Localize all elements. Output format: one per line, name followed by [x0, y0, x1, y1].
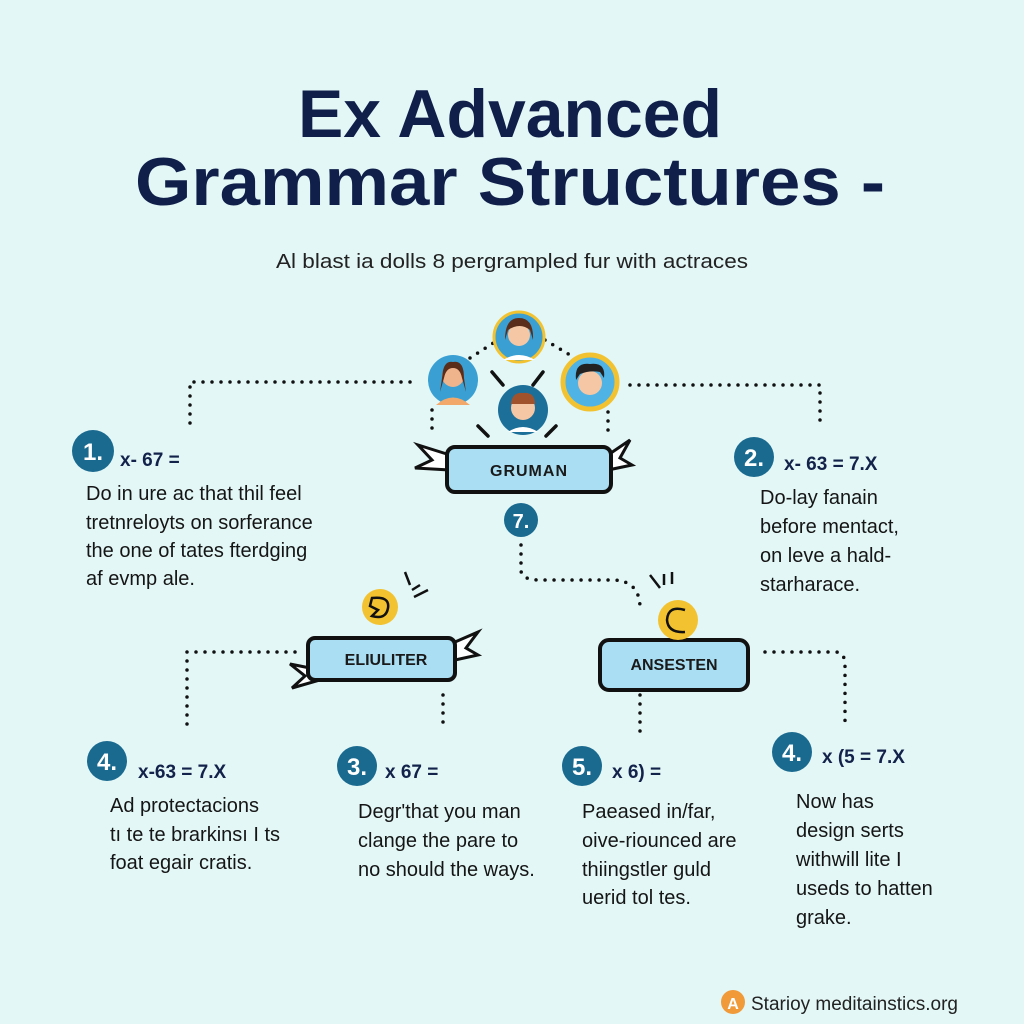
- icon: coin: [362, 572, 428, 625]
- banner: ANSESTEN: ANSESTEN: [630, 657, 718, 674]
- item 2: before mentact,: [760, 516, 899, 538]
- item 3: 3.: [347, 754, 367, 781]
- subtitle: Al blast ia dolls 8 pergrampled fur with actraces: [276, 251, 748, 273]
- item 3: [337, 746, 535, 881]
- item 5: x 6) =: [612, 762, 661, 783]
- item 4 right: Now has: [796, 791, 874, 813]
- item 2: [734, 437, 899, 596]
- item 4 left: x-63 = 7.X: [138, 762, 227, 783]
- item 2: 2.: [744, 445, 764, 472]
- item 4 left: foat egair cratis.: [110, 852, 252, 874]
- item 3: Degr'that you man: [358, 801, 521, 823]
- banner: GRUMAN: GRUMAN: [490, 463, 568, 480]
- banner: ELIULITER: ELIULITER: [345, 652, 428, 669]
- title: Ex Advanced: [298, 76, 722, 152]
- item 5: oive-riounced are: [582, 830, 737, 852]
- item 1: tretnreloyts on sorferance: [86, 512, 313, 534]
- title: [135, 76, 885, 220]
- item 3: x 67 =: [385, 762, 438, 783]
- banner: ANSESTEN: [600, 572, 748, 690]
- item 5: Paeased in/far,: [582, 801, 715, 823]
- banner: GRUMAN: [415, 440, 632, 492]
- item 2: starharace.: [760, 574, 860, 596]
- item 4 right: grake.: [796, 907, 852, 929]
- item 5: 5.: [572, 754, 592, 781]
- item 2: x- 63 = 7.X: [784, 454, 878, 475]
- avatars: [428, 312, 617, 435]
- footer: Starioy meditainstics.org: [751, 994, 958, 1015]
- item 3: no should the ways.: [358, 859, 535, 881]
- badge 7: 7.: [513, 511, 529, 533]
- item 3: clange the pare to: [358, 830, 518, 852]
- badge 7: [504, 503, 538, 537]
- title: Grammar Structures -: [135, 144, 885, 220]
- banner: ELIULITER: [290, 572, 478, 688]
- item 5: uerid tol tes.: [582, 887, 691, 909]
- footer: A: [727, 996, 739, 1013]
- item 5: [562, 746, 737, 909]
- connectors: [187, 340, 845, 738]
- item 4 right: withwill lite I: [795, 849, 902, 871]
- item 4 right: useds to hatten: [796, 878, 933, 900]
- item 4 left: 4.: [97, 749, 117, 776]
- item 4 left: tı te te brarkinsı I ts: [110, 824, 280, 846]
- item 4 right: design serts: [796, 820, 904, 842]
- icon: coin: [650, 572, 698, 640]
- item 1: Do in ure ac that thil feel: [86, 483, 302, 505]
- item 4 right: 4.: [782, 740, 802, 767]
- item 5: thiingstler guld: [582, 859, 711, 881]
- item 1: x- 67 =: [120, 450, 180, 471]
- item 1: 1.: [83, 439, 103, 466]
- item 4 left: Ad protectacions: [110, 795, 259, 817]
- item 4 right: [772, 732, 933, 929]
- item 1: af evmp ale.: [86, 568, 195, 590]
- item 1: [72, 430, 313, 590]
- item 2: on leve a hald-: [760, 545, 891, 567]
- item 4 right: x (5 = 7.X: [822, 747, 905, 768]
- item 2: Do-lay fanain: [760, 487, 878, 509]
- item 1: the one of tates fterdging: [86, 540, 307, 562]
- item 4 left: [87, 741, 280, 874]
